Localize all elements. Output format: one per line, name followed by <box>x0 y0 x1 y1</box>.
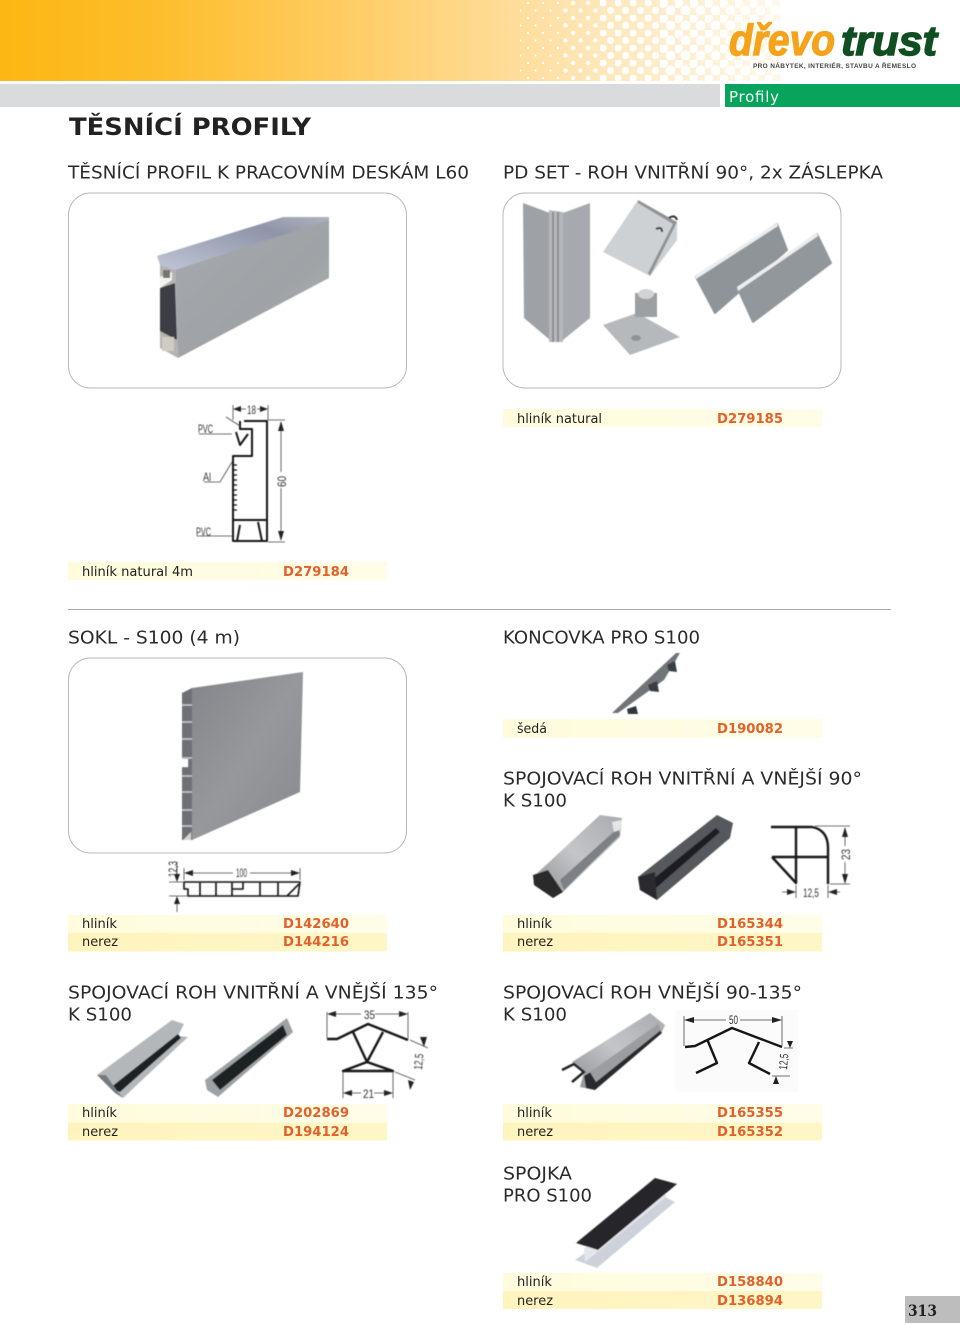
technical drawing: L60 cross-section: Al <box>203 470 211 484</box>
technical drawing: L60 cross-section: 60 <box>275 476 289 487</box>
table: PD set: D279185 <box>717 411 783 427</box>
technical drawing: 135 degree connector: 35 <box>364 1008 375 1022</box>
heading: 90 degree connector: SPOJOVACÍ ROH VNITŘNÍ A VNĚJŠÍ 90° <box>503 768 862 790</box>
table: 90-135 degree connector: nerez <box>517 1124 553 1140</box>
product: aluminium 135 degree connector <box>97 1020 188 1098</box>
table: L60 profile: D279184 <box>283 564 349 580</box>
heading: S100 plinth: SOKL - S100 (4 m) <box>68 628 240 648</box>
table: 90-135 degree connector: D165352 <box>717 1124 783 1140</box>
product: stainless 135 degree connector <box>205 1018 293 1097</box>
technical drawing: 90 degree connector: 12,5 <box>803 886 819 900</box>
product: end cap base <box>603 289 680 355</box>
technical drawing: L60 cross-section <box>196 403 289 542</box>
product: 90-135 degree connector <box>562 1013 665 1090</box>
table: 90 degree connector: hliník <box>517 916 552 932</box>
heading: 90-135 degree outer connector: K S100 <box>503 1004 567 1026</box>
table: 90-135 degree connector: D165355 <box>717 1105 783 1121</box>
panel: PD set photo <box>503 193 841 388</box>
table: PD set: hliník natural <box>517 411 602 427</box>
product: stainless 90 degree connector <box>638 815 733 900</box>
technical drawing: plinth cross-section <box>166 861 300 912</box>
technical drawing: 90 degree connector <box>771 826 853 900</box>
technical drawing: 135 degree connector: 21 <box>363 1087 374 1101</box>
heading: 90-135 degree outer connector: SPOJOVACÍ ROH VNĚJŠÍ 90-135° <box>503 982 802 1004</box>
table: 135 degree connector: D194124 <box>283 1124 349 1140</box>
table: 135 degree connector: hliník <box>82 1105 117 1121</box>
product: cover caps <box>695 223 831 322</box>
product: aluminium 90 degree connector <box>533 815 622 898</box>
table: 90 degree connector <box>503 915 822 952</box>
section label: Profily <box>729 88 779 106</box>
table: 90 degree connector: nerez <box>517 934 553 950</box>
heading: 135 degree connector <box>68 982 438 1026</box>
heading: S100 end cap: KONCOVKA PRO S100 <box>503 628 700 648</box>
heading: S100 joiner: PRO S100 <box>503 1186 592 1206</box>
table: S100 joiner: D136894 <box>717 1293 783 1309</box>
heading: 90 degree connector <box>503 768 862 812</box>
table: S100 plinth: hliník <box>82 916 117 932</box>
panel: S100 plinth photo <box>68 658 406 853</box>
table: S100 end cap <box>503 719 822 738</box>
panel: L60 profile photo <box>68 193 406 388</box>
table: S100 plinth: nerez <box>82 934 118 950</box>
table: 90 degree connector: D165351 <box>717 934 783 950</box>
table: L60 profile <box>68 562 387 580</box>
heading: 90 degree connector: K S100 <box>503 790 567 812</box>
product: L60 profile <box>157 217 329 358</box>
heading: S100 joiner <box>503 1164 592 1206</box>
technical drawing: 135 degree connector: 12,5 <box>411 1053 426 1070</box>
table: 90-135 degree connector: hliník <box>517 1105 552 1121</box>
technical drawing: plinth cross-section: 100 <box>236 866 247 880</box>
table: S100 end cap: D190082 <box>717 721 783 737</box>
table: 135 degree connector: D202869 <box>283 1105 349 1121</box>
table: L60 profile: hliník natural 4m <box>82 564 193 580</box>
table: 135 degree connector <box>68 1104 387 1140</box>
heading: S100 joiner: SPOJKA <box>503 1164 573 1184</box>
page number <box>905 1296 960 1323</box>
technical drawing: 90-135 degree connector <box>675 1010 798 1092</box>
page number: 313 <box>908 1301 937 1320</box>
product: end cap plate <box>603 200 677 276</box>
technical drawing: L60 cross-section: PVC <box>196 525 211 539</box>
product: inner corner <box>523 203 590 342</box>
technical drawing: 90 degree connector: 23 <box>839 849 853 860</box>
technical drawing: 90-135 degree connector: 50 <box>729 1013 738 1027</box>
logo word: trust: trust <box>841 17 939 64</box>
table: S100 joiner: nerez <box>517 1293 553 1309</box>
technical drawing: L60 cross-section: 18 <box>247 403 256 417</box>
table: PD set <box>503 409 822 427</box>
table: S100 joiner: D158840 <box>717 1274 783 1290</box>
technical drawing: L60 cross-section: PVC <box>198 422 213 436</box>
heading: L60 profile: TĚSNÍCÍ PROFIL K PRACOVNÍM DESKÁM L60 <box>67 162 469 184</box>
table: S100 end cap: šedá <box>517 721 547 737</box>
logo <box>729 16 939 70</box>
section bar <box>0 84 960 107</box>
table: 90 degree connector: D165344 <box>717 916 783 932</box>
table: S100 plinth <box>68 915 387 952</box>
header banner <box>0 0 780 81</box>
table: 90-135 degree connector <box>503 1104 822 1140</box>
technical drawing: plinth cross-section: 12,3 <box>166 861 180 877</box>
product: S100 joiner <box>575 1178 677 1268</box>
heading: 135 degree connector: K S100 <box>68 1004 132 1026</box>
table: S100 plinth: D142640 <box>283 916 349 932</box>
product: S100 end cap <box>612 653 680 714</box>
product: plinth <box>180 672 303 840</box>
table: 135 degree connector: nerez <box>82 1124 118 1140</box>
page title: TĚSNÍCÍ PROFILY <box>69 112 312 141</box>
table: S100 plinth: D144216 <box>283 934 349 950</box>
heading: 135 degree connector: SPOJOVACÍ ROH VNITŘNÍ A VNĚJŠÍ 135° <box>68 982 438 1004</box>
heading: 90-135 degree outer connector <box>503 982 802 1026</box>
technical drawing: 135 degree connector <box>327 1008 428 1101</box>
heading: PD set: PD SET - ROH VNITŘNÍ 90°, 2x ZÁSLEPKA <box>503 162 884 184</box>
logo word: dřevo: dřevo <box>729 16 835 65</box>
table: S100 joiner: hliník <box>517 1274 552 1290</box>
table: S100 joiner <box>503 1273 822 1309</box>
logo tagline: PRO NÁBYTEK, INTERIÉR, STAVBU A ŘEMESLO <box>753 61 916 70</box>
technical drawing: 90-135 degree connector: 12,5 <box>776 1053 791 1070</box>
